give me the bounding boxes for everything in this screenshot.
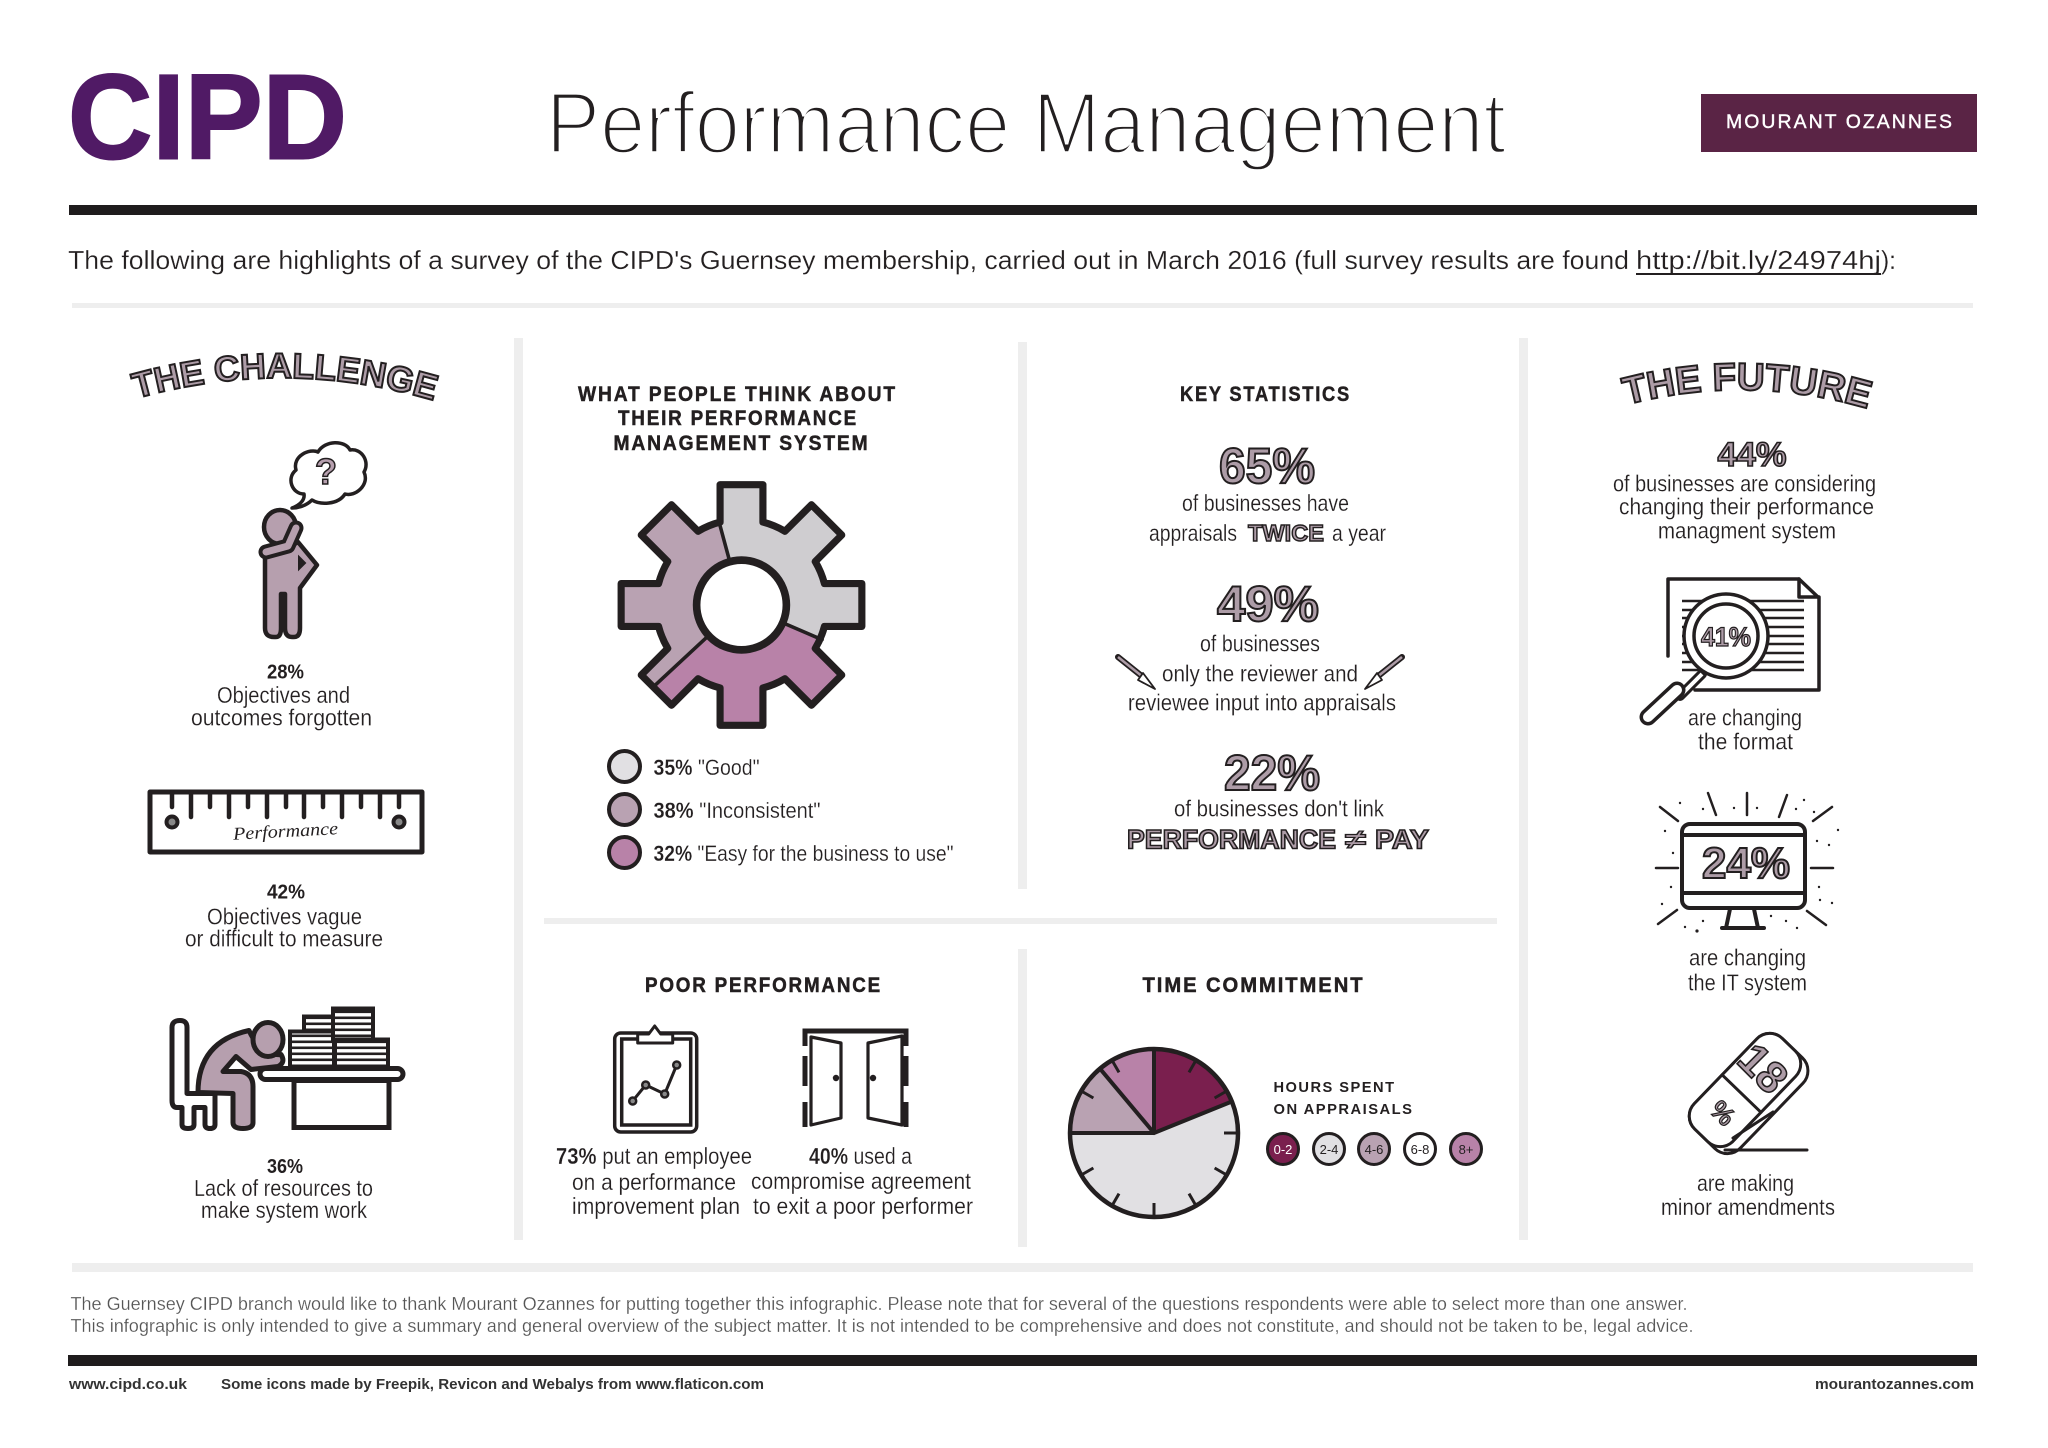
footer links <box>68 1377 1974 1393</box>
stat: 49%: of businesses <box>1200 630 1320 656</box>
heading: the challenge: THE CHALLENGE <box>129 352 440 402</box>
icon: eraser: % <box>1704 1094 1742 1132</box>
stat: 36%: make system work <box>201 1197 367 1223</box>
text: are changing the IT system: are changing <box>1689 944 1806 970</box>
heading: what people think: MANAGEMENT SYSTEM <box>614 432 870 455</box>
icon: eraser: 18 <box>1728 1034 1797 1103</box>
panel: what people think <box>538 383 954 868</box>
legend <box>609 751 954 868</box>
stat: 49%: only the reviewer and <box>1162 660 1358 686</box>
footer links: mourantozannes.com <box>1815 1377 1974 1393</box>
panel: poor performance <box>556 974 973 1219</box>
footnote: This infographic is only intended to give a summary and general overview of the subject matter. It is not intended to be comprehensive and does not constitute, and should not be taken to be, legal advice. <box>70 1316 1694 1336</box>
legend: hours spent: 6-8 <box>1411 1142 1429 1157</box>
text: are changing the IT system <box>1688 944 1807 996</box>
stat: 42% <box>185 882 383 952</box>
intro text: ): <box>1881 245 1896 275</box>
text: 40% <box>751 1143 973 1219</box>
icon: thinking person: ? <box>315 451 337 492</box>
heading: poor performance: POOR PERFORMANCE <box>645 974 882 997</box>
text: 40%: compromise agreement <box>751 1168 972 1194</box>
text: 40%: 40% used a <box>809 1143 912 1169</box>
text: are making minor amendments: minor amendments <box>1661 1194 1835 1220</box>
legend: hours spent: 0-2 <box>1274 1142 1292 1157</box>
top rule <box>69 205 1977 215</box>
bottom rule <box>68 1355 1977 1366</box>
stat: 22%: of businesses don't link <box>1174 796 1384 822</box>
stat: 44%: managment system <box>1658 518 1836 544</box>
icon: document with magnifier <box>1648 579 1819 717</box>
panel: the challenge <box>129 352 440 1223</box>
footnote: The Guernsey CIPD branch would like to thank Mourant Ozannes for putting together this infographic. Please note that for several of the questions respondents were able to select more than one answer. <box>70 1294 1688 1314</box>
stat: 28% <box>191 662 372 730</box>
logo: CIPD: CIPD <box>68 48 347 184</box>
icon: thinking person <box>264 443 366 637</box>
stat: 49% <box>1128 576 1396 716</box>
panel: key statistics <box>1118 383 1429 854</box>
title: Performance Management <box>546 75 1506 172</box>
icon: computer monitor <box>1656 793 1839 933</box>
stat: 44%: of businesses are considering <box>1613 470 1876 496</box>
stat: 65%: a year <box>1332 520 1386 546</box>
icon: ruler <box>150 792 422 852</box>
icon: clipboard <box>615 1026 697 1132</box>
icon: ruler: Performance <box>231 818 338 844</box>
legend: hours spent: ON APPRAISALS <box>1274 1101 1414 1118</box>
badge: Mourant Ozannes: MOURANT OZANNES <box>1726 112 1954 133</box>
stat: 22%: PERFORMANCE <box>1127 824 1336 854</box>
chart: gear <box>618 481 866 729</box>
legend: 32% "Easy for the business to use" <box>654 841 954 866</box>
legend: 38% "Inconsistent" <box>654 798 820 823</box>
text: are making minor amendments: are making <box>1697 1170 1794 1196</box>
heading: what people think: WHAT PEOPLE THINK ABOUT <box>578 383 897 406</box>
legend: hours spent <box>1268 1079 1482 1164</box>
stat: 65%: TWICE <box>1248 520 1324 546</box>
icon: person slumped at desk <box>172 1008 403 1128</box>
stat: 65%: appraisals <box>1149 520 1237 546</box>
text: 73% <box>556 1143 752 1219</box>
icon: right pen <box>1365 657 1402 689</box>
heading: what people think: THEIR PERFORMANCE <box>618 407 858 430</box>
stat: 42%: Objectives vague <box>207 904 362 930</box>
chart: clock pie <box>1070 1049 1238 1217</box>
legend: hours spent: 4-6 <box>1365 1142 1383 1157</box>
stat: 65%: 65% <box>1219 438 1315 494</box>
icon: left pen <box>1118 657 1155 689</box>
text: 73%: 73% put an employee <box>556 1143 752 1169</box>
heading: what people think <box>578 383 897 455</box>
stat: 28%: outcomes forgotten <box>191 704 372 730</box>
text: 40%: to exit a poor performer <box>753 1193 973 1219</box>
legend: hours spent: HOURS SPENT <box>1274 1079 1396 1096</box>
icon: computer monitor: 24% <box>1702 839 1790 888</box>
text: are making minor amendments <box>1661 1170 1835 1220</box>
icon: eraser <box>1682 1026 1815 1161</box>
icon: open doors <box>805 1031 906 1127</box>
legend: 35% "Good" <box>654 755 760 780</box>
stat: 42%: or difficult to measure <box>185 926 383 952</box>
footer links: www.cipd.co.uk <box>68 1377 188 1393</box>
text: are changing the format: are changing <box>1688 704 1802 730</box>
heading: the future: THE FUTURE <box>1620 362 1874 410</box>
stat: 22%: ≠ <box>1345 824 1366 854</box>
stat: 49%: reviewee input into appraisals <box>1128 690 1396 716</box>
legend: hours spent: 8+ <box>1459 1142 1473 1157</box>
stat: 44%: changing their performance <box>1619 494 1874 520</box>
stat: 28%: Objectives and <box>217 682 350 708</box>
stat: 36%: 36% <box>267 1156 303 1178</box>
stat: 36% <box>194 1156 373 1223</box>
footnote <box>70 1294 1694 1336</box>
footer links: Some icons made by Freepik, Revicon and Webalys from www.flaticon.com <box>221 1377 764 1393</box>
text: 73%: improvement plan <box>572 1193 740 1219</box>
heading: key statistics: KEY STATISTICS <box>1180 383 1351 406</box>
heading: time commitment: TIME COMMITMENT <box>1142 974 1364 997</box>
legend: hours spent: 2-4 <box>1320 1142 1338 1157</box>
intro text: http://bit.ly/24974hj <box>1636 245 1881 275</box>
panel: the future <box>1613 362 1876 1220</box>
stat: 65% <box>1149 438 1386 546</box>
stat: 22%: PAY <box>1375 824 1429 854</box>
badge: Mourant Ozannes <box>1701 94 1977 152</box>
text: are changing the IT system: the IT system <box>1688 970 1807 996</box>
icon: document with magnifier: 41% <box>1701 622 1751 652</box>
text: are changing the format: the format <box>1698 728 1794 754</box>
stat: 44% <box>1613 436 1876 544</box>
stat: 36%: Lack of resources to <box>194 1175 373 1201</box>
stat: 44%: 44% <box>1718 436 1786 474</box>
intro text: The following are highlights of a survey of the CIPD's Guernsey membership, carried out in March 2016 (full survey results are found <box>68 245 1629 275</box>
text: 73%: on a performance <box>572 1169 736 1195</box>
stat: 22% <box>1127 745 1429 854</box>
stat: 28%: 28% <box>267 662 304 684</box>
stat: 49%: 49% <box>1217 576 1319 632</box>
stat: 22%: 22% <box>1224 745 1320 801</box>
text: are changing the format <box>1688 704 1802 754</box>
panel: time commitment <box>1070 974 1482 1217</box>
stat: 42%: 42% <box>267 882 305 904</box>
stat: 65%: of businesses have <box>1182 490 1349 516</box>
